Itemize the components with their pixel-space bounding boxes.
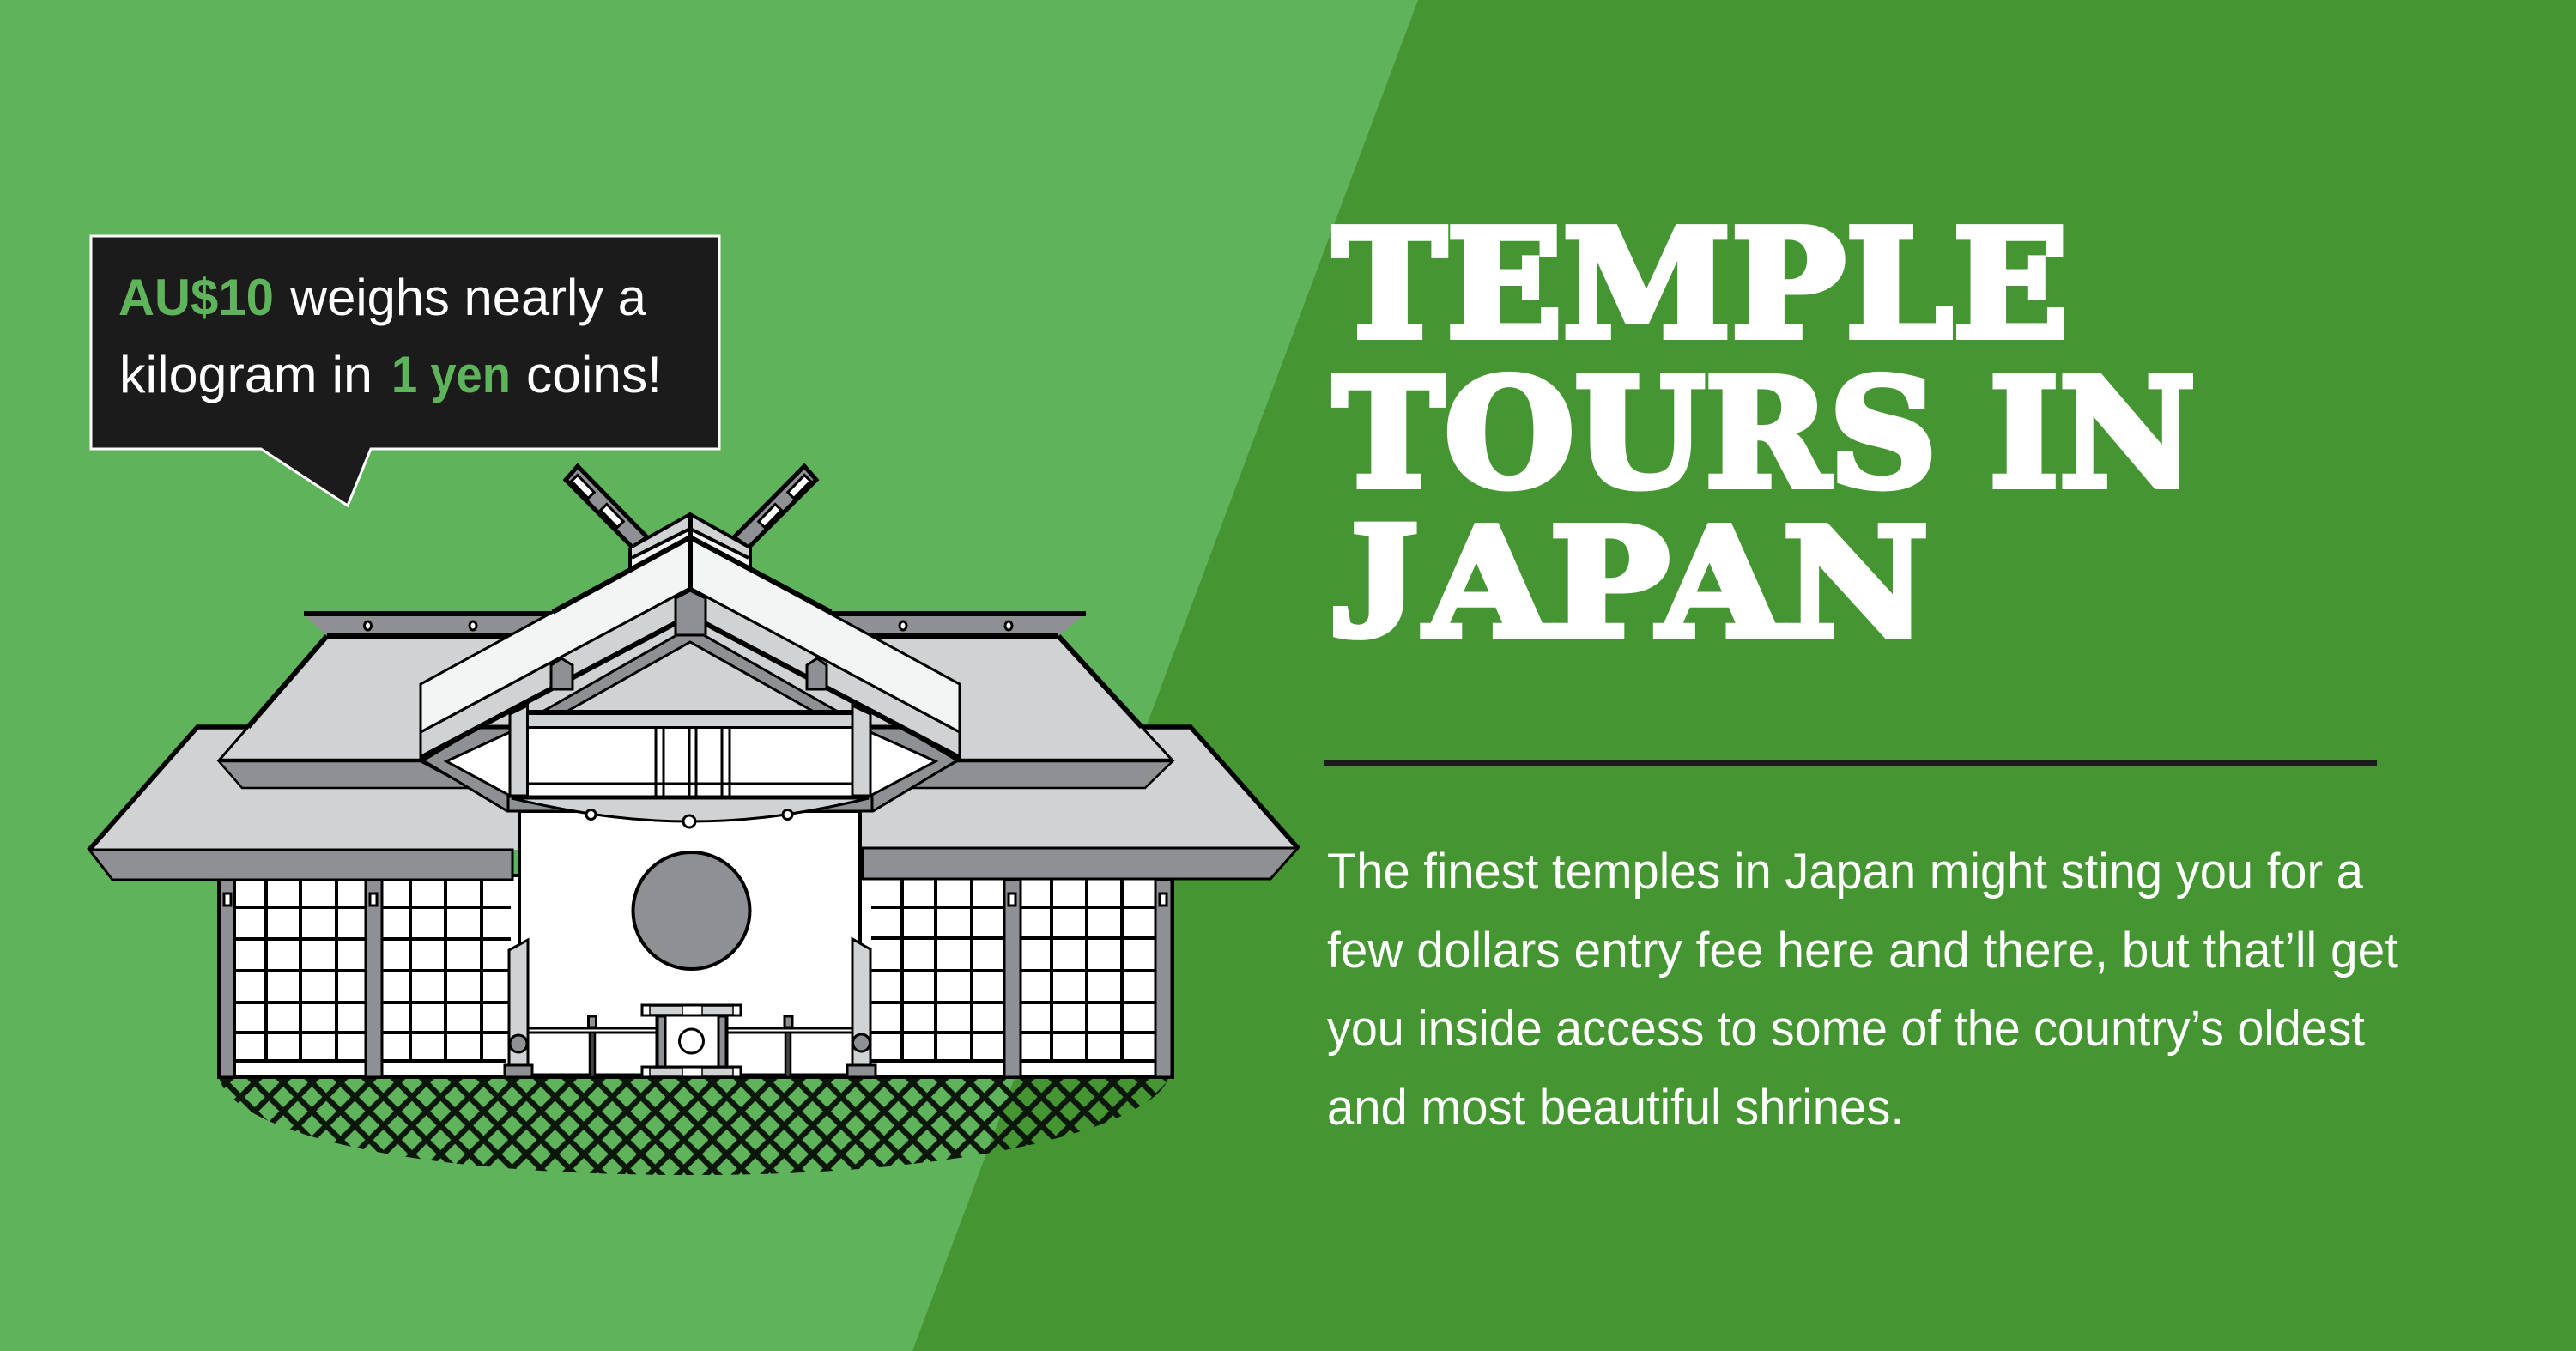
callout text: kilogram in: [119, 346, 373, 403]
side gable panels: [423, 728, 957, 811]
fence: [519, 1016, 860, 1077]
callout text: AU$10: [118, 269, 274, 326]
gable white bands: [421, 515, 960, 758]
right gate pillar: [847, 939, 876, 1077]
title: J: [1329, 486, 1418, 672]
body text: few dollars entry fee here and there, but that’ll get: [1327, 923, 2398, 978]
lower roof left: [89, 727, 524, 880]
title: [1329, 197, 2196, 672]
background panel: light green diagonal: [0, 0, 1418, 1351]
callout: one yen coins: [91, 236, 719, 506]
callout text: weighs nearly a: [289, 269, 647, 326]
small right post: [807, 658, 827, 689]
callout bubble: [91, 236, 719, 506]
title: TEMPLE: [1333, 197, 2069, 373]
callout text: 1 yen: [391, 346, 511, 403]
gable interior: [476, 616, 904, 728]
crossed roof beams: [566, 466, 816, 548]
left gate pillar: [505, 940, 532, 1077]
divider rule: [1324, 760, 2377, 766]
title: TOURS IN: [1333, 347, 2196, 522]
central altar: [642, 1005, 741, 1077]
lower roof right: [858, 727, 1298, 879]
right wing wall with shoji grid: [860, 875, 1173, 1077]
body text: [1327, 844, 2398, 1136]
body text: and most beautiful shrines.: [1327, 1080, 1904, 1136]
ridge cap: [630, 514, 750, 570]
lower front beam with curve: [508, 797, 872, 827]
lattice ground: [215, 1077, 1176, 1176]
illustration: Japanese temple: [89, 466, 1298, 1176]
title: APAN: [1423, 496, 1929, 671]
body text: you inside access to some of the country’s oldest: [1327, 1001, 2365, 1057]
central white wall: [519, 811, 860, 1077]
front window and beams: [510, 706, 870, 797]
upper roof: [219, 636, 1173, 788]
body text: The finest temples in Japan might sting you for a: [1327, 844, 2364, 900]
callout text: [118, 269, 662, 403]
callout text: coins!: [526, 346, 662, 403]
king post: [676, 591, 706, 635]
small left post: [551, 658, 573, 689]
central grey disc: [633, 852, 750, 969]
left wing wall with shoji grid: [219, 875, 519, 1077]
ridge strip with pegs: [303, 614, 1086, 636]
